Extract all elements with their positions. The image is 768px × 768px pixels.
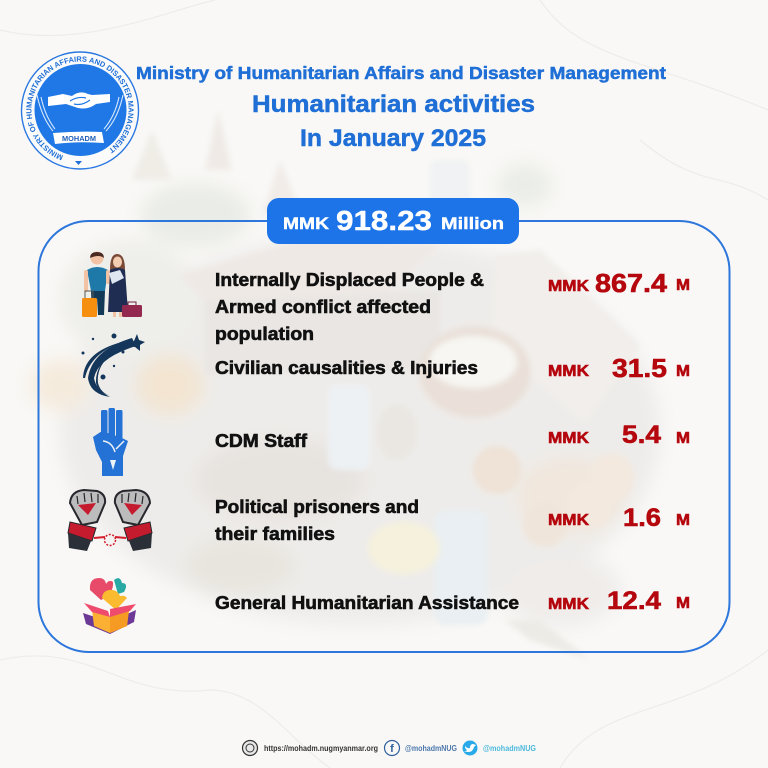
icon: displaced family with luggage [82, 252, 142, 317]
label: internally displaced people: population [215, 324, 314, 344]
icon: raised fists with broken chain [68, 490, 152, 551]
icon: shooting star [82, 334, 145, 397]
amount: 12.4 M: 12.4 [607, 587, 661, 615]
amount: 31.5 M: M [676, 363, 690, 380]
twitter handle: @mohadmNUG [483, 744, 536, 753]
heading: humanitarian activities: Humanitarian activities [252, 91, 535, 118]
amount: 5.4 M: MMK [548, 430, 589, 447]
amount: 5.4 M: 5.4 [622, 421, 661, 449]
label: internally displaced people: Internally Displaced People & [215, 270, 484, 290]
amount: 867.4 M [548, 268, 690, 298]
amount: 1.6 M: MMK [548, 512, 589, 529]
icon: three finger salute [93, 408, 128, 476]
logo: ministry emblem: MINISTRY OF HUMANITARIAN AFFAIRS AND DISASTER MANAGEMENT [26, 56, 134, 160]
panel: activities outline [38, 221, 730, 652]
heading: month: In January 2025 [300, 125, 486, 152]
amount: 31.5 M [548, 353, 690, 383]
amount: 1.6 M: 1.6 [623, 504, 661, 532]
label: civilian casualties: Civilian causalities & Injuries [215, 358, 478, 378]
icon: twitter [462, 740, 478, 756]
amount: 12.4 M: MMK [548, 596, 589, 613]
amount: 31.5 M: MMK [548, 363, 589, 380]
amount: 867.4 M: MMK [548, 278, 589, 295]
amount: 1.6 M [548, 504, 690, 532]
amount: 12.4 M [548, 587, 690, 615]
icon: facebook: f [390, 743, 394, 755]
label: political prisoners: Political prisoners and [215, 497, 419, 517]
website url: https://mohadm.nugmyanmar.org [264, 743, 378, 753]
logo: ministry emblem: MOHADM [62, 134, 96, 143]
icon: facebook [384, 740, 400, 756]
total amount pill: MMK [283, 215, 329, 233]
amount: 31.5 M: 31.5 [612, 353, 667, 383]
footer: website and social links [242, 740, 536, 756]
total amount pill [267, 198, 519, 244]
amount: 867.4 M: M [676, 277, 690, 294]
label: CDM staff: CDM Staff [215, 431, 308, 451]
icon: gift box with hearts [83, 578, 136, 634]
amount: 5.4 M [548, 421, 690, 449]
amount: 1.6 M: M [676, 512, 690, 529]
title: ministry name: Ministry of Humanitarian Affairs and Disaster Management [136, 63, 666, 83]
amount: 12.4 M: M [676, 595, 690, 612]
label: political prisoners: their families [215, 524, 335, 544]
total amount pill: Million [441, 215, 504, 233]
label: internally displaced people: Armed conflict affected [215, 297, 431, 317]
facebook handle: @mohadmNUG [405, 744, 457, 753]
amount: 5.4 M: M [676, 430, 690, 447]
label: general humanitarian assistance: General Humanitarian Assistance [215, 593, 519, 613]
amount: 867.4 M: 867.4 [595, 268, 668, 298]
icon: website [242, 740, 258, 756]
total amount pill: 918.23 [336, 205, 432, 236]
